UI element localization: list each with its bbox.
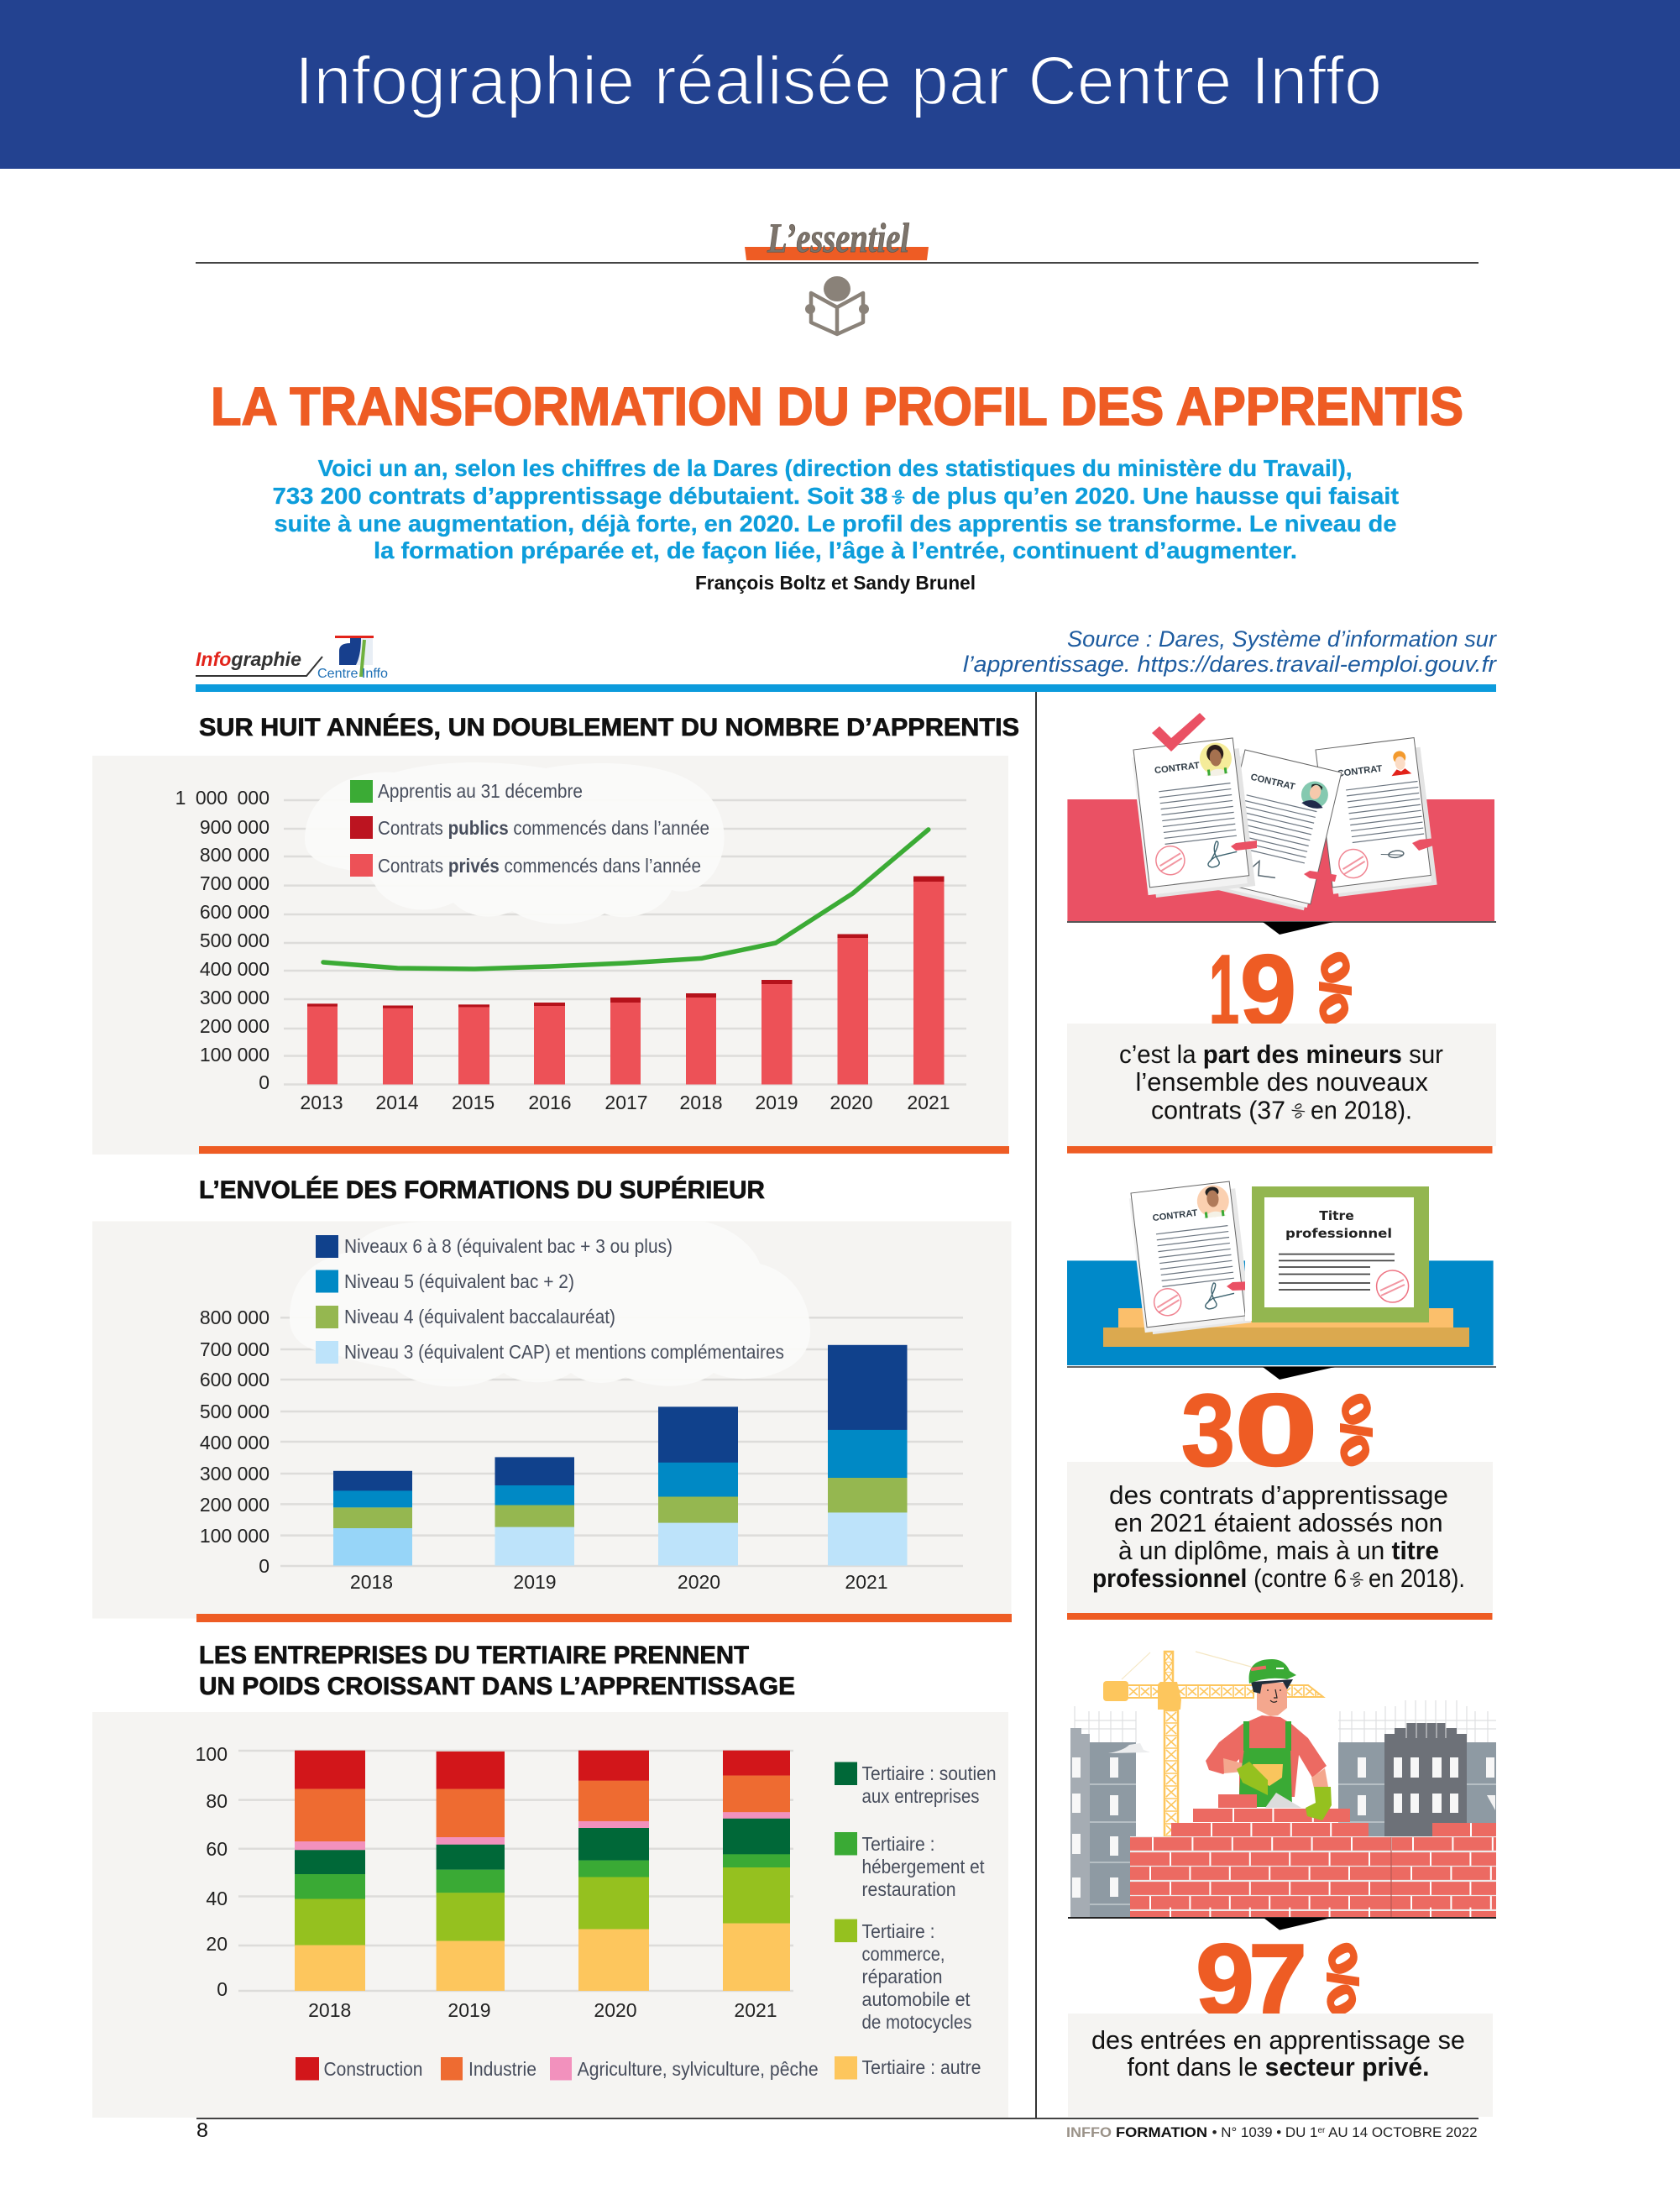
icon: check mark (1152, 713, 1206, 751)
diploma (1245, 1186, 1429, 1322)
text block: en 2018). (1311, 1095, 1412, 1125)
byline: François Boltz et Sandy Brunel (695, 572, 976, 594)
y axis labels: 100 (196, 1743, 228, 1765)
y axis labels: 500 000 (200, 1401, 270, 1422)
forearms (1223, 1758, 1243, 1773)
number 19: 9 (1240, 934, 1296, 1048)
contract document: CONTRAT (1152, 1208, 1198, 1223)
publication line: INFFO (1066, 2124, 1112, 2140)
column divider (1035, 692, 1037, 2118)
diploma: Titre (1319, 1208, 1354, 1223)
panel: formations chart (92, 1176, 1012, 1622)
text block: des contrats d’apprentissage (1109, 1480, 1448, 1510)
text block: % (1286, 1101, 1309, 1122)
text block: en 2021 étaient adossés non (1114, 1508, 1443, 1537)
publication line: er (1317, 2126, 1326, 2135)
percent sign: % (1299, 1931, 1385, 2028)
y axis labels: 900 000 (200, 816, 270, 838)
legend: chart 1: Contrats privés commencés dans l’année (378, 855, 701, 877)
publication line (1066, 2124, 1478, 2140)
crane (1103, 1652, 1323, 1836)
contract document (1128, 1181, 1251, 1335)
x axis labels: 2015 (452, 1092, 495, 1113)
y axis labels (175, 787, 270, 1093)
text block: font dans le secteur privé. (1127, 2052, 1429, 2082)
text block (1067, 1462, 1493, 1613)
intro text (272, 455, 1399, 563)
doc 1 (1131, 737, 1255, 898)
legend: chart 3: Tertiaire : autre (861, 2056, 981, 2078)
y axis labels: 0 (259, 1071, 270, 1093)
mortar joints (1149, 1815, 1496, 1914)
arrow pointer 3 (1264, 1918, 1332, 1930)
legend: chart 1: Contrats publics commencés dans l’année (378, 817, 709, 839)
publication line: AU 14 OCTOBRE 2022 (1325, 2124, 1478, 2140)
legend: chart 2: Niveaux 6 à 8 (équivalent bac + 3 ou plus) (344, 1235, 673, 1257)
legend: chart 2 (316, 1235, 784, 1364)
stacked bars (295, 1751, 790, 1991)
legend: chart 1 (350, 780, 709, 877)
logo: infographie centre inffo: Infographie (196, 648, 301, 670)
x axis labels: 2021 (734, 1999, 777, 2021)
helmet (1249, 1659, 1296, 1684)
percent sign: % (1291, 940, 1378, 1037)
stacked bars (307, 877, 944, 1085)
number 19: 1 (1209, 934, 1239, 1048)
source: l’apprentissage. https://dares.travail-emploi.gouv.fr (963, 652, 1497, 677)
text block: % (1345, 1569, 1367, 1590)
x axis labels: 2020 (678, 1571, 720, 1593)
header banner: Infographie réalisée par Centre Inffo (295, 43, 1382, 119)
overalls (1243, 1721, 1291, 1751)
legend: chart 3: Construction (324, 2058, 423, 2080)
stat: 30 % (1067, 1373, 1493, 1620)
arrow pointer 1 (1263, 922, 1333, 935)
logo: infographie centre inffo (196, 636, 388, 681)
x axis labels (308, 1999, 777, 2021)
publication line: • N° 1039 • DU 1 (1212, 2124, 1318, 2140)
y axis labels: 800 000 (200, 844, 270, 866)
legend: chart 2: Niveau 3 (équivalent CAP) et mentions complémentaires (344, 1341, 784, 1363)
legend cloud (305, 762, 725, 924)
heading: chart 2: L’ENVOLÉE DES FORMATIONS DU SUPÉRIEUR (199, 1176, 765, 1204)
number 97: 9 (1196, 1923, 1254, 2037)
y axis labels: 60 (206, 1838, 228, 1860)
number 30 (1181, 1373, 1318, 1487)
legend: chart 2: Niveau 4 (équivalent baccalauréat) (344, 1306, 615, 1328)
section tag: l'essentiel: L’essentiel (767, 214, 909, 261)
x axis labels: 2013 (300, 1092, 343, 1113)
main title: LA TRANSFORMATION DU PROFIL DES APPRENTIS (211, 376, 1463, 437)
intro text: suite à une augmentation, déjà forte, en 2020. Le profil des apprentis se transforme. Le niveau de (274, 511, 1397, 537)
icon: reader with book (805, 276, 869, 334)
arrow pointer 2 (1263, 1367, 1335, 1380)
doc 3 (1316, 737, 1437, 898)
gridlines (238, 1751, 793, 1991)
text block: c’est la part des mineurs sur (1119, 1040, 1443, 1069)
intro text: 733 200 contrats d’apprentissage débutaient. Soit 38 (272, 483, 888, 509)
y axis labels (200, 1307, 270, 1577)
intro text: la formation préparée et, de façon liée, l’âge à l’entrée, continuent d’augmenter. (374, 537, 1297, 563)
gloves (1237, 1762, 1268, 1795)
y axis labels: 0 (259, 1555, 270, 1577)
intro text: % (887, 487, 908, 507)
illustration: contrats (1067, 713, 1496, 923)
legend: chart 1: Apprentis au 31 décembre (378, 780, 583, 802)
heading: chart 3: LES ENTREPRISES DU TERTIAIRE PRENNENT (199, 1642, 749, 1669)
illustration: titre professionnel (1067, 1181, 1496, 1368)
section tag: l'essentiel (196, 214, 1479, 264)
y axis labels: 500 000 (200, 930, 270, 951)
x axis labels: 2018 (679, 1092, 723, 1113)
header banner (0, 0, 1680, 169)
intro text: Voici un an, selon les chiffres de la Dares (direction des statistiques du ministère du Travail), (318, 455, 1353, 481)
x axis labels (300, 1092, 950, 1113)
x axis labels: 2017 (604, 1092, 648, 1113)
heading: chart 1: SUR HUIT ANNÉES, UN DOUBLEMENT DU NOMBRE D’APPRENTIS (199, 713, 1019, 741)
y axis labels: 300 000 (200, 987, 270, 1008)
doc 2 (1207, 749, 1342, 912)
gridlines (284, 800, 966, 1085)
x axis labels: 2019 (513, 1571, 557, 1593)
x axis labels: 2019 (447, 1999, 491, 2021)
legend: chart 3: commerce, (861, 1943, 945, 1965)
y axis labels: 400 000 (200, 1432, 270, 1453)
publication line: FORMATION (1116, 2124, 1207, 2140)
neck and face (1257, 1696, 1287, 1716)
x axis labels: 2021 (845, 1571, 888, 1593)
heading: chart 3 (199, 1642, 795, 1700)
y axis labels: 40 (206, 1888, 228, 1909)
legend: chart 3: Tertiaire : soutien (861, 1762, 996, 1784)
x axis labels: 2020 (594, 1999, 637, 2021)
text block: professionnel (contre 6 (1092, 1563, 1347, 1593)
y axis labels: 400 000 (200, 958, 270, 980)
diploma: professionnel (1285, 1226, 1392, 1241)
number 19 (1209, 934, 1296, 1048)
y axis labels: 1 000 000 (175, 787, 270, 809)
legend: chart 3: Agriculture, sylviculture, pêche (578, 2058, 819, 2080)
number 97 (1196, 1923, 1307, 2037)
stat: 97 % (1068, 1943, 1493, 2117)
panel: entreprises chart (92, 1642, 1008, 2118)
panel: apprentis chart (92, 713, 1019, 1155)
page number: 8 (196, 2119, 208, 2142)
y axis labels: 700 000 (200, 872, 270, 894)
legend: chart 3: aux entreprises (861, 1785, 979, 1807)
doc 1: CONTRAT (1154, 761, 1201, 776)
text block: contrats (37 (1151, 1095, 1285, 1125)
shirt (1206, 1715, 1327, 1797)
logo: infographie centre inffo: Centre Inffo (317, 667, 388, 681)
legend: chart 3: de motocycles (861, 2011, 972, 2033)
stacked bars (333, 1345, 907, 1565)
y axis labels: 20 (206, 1933, 228, 1955)
legend: chart 2: Niveau 5 (équivalent bac + 2) (344, 1270, 574, 1292)
x axis labels: 2019 (755, 1092, 798, 1113)
number 30: 3 (1181, 1373, 1235, 1487)
y axis labels: 800 000 (200, 1307, 270, 1328)
legend cloud (290, 1222, 810, 1386)
y axis labels: 700 000 (200, 1338, 270, 1360)
legend: chart 3: Tertiaire : (861, 1920, 935, 1942)
number 30: 0 (1234, 1373, 1318, 1487)
text block: des entrées en apprentissage se (1091, 2025, 1465, 2055)
legend: chart 3: restauration (861, 1878, 955, 1900)
text block: l’ensemble des nouveaux (1135, 1067, 1428, 1097)
blue rule (196, 684, 1496, 692)
brick wall (1130, 1787, 1496, 1917)
y axis labels: 0 (217, 1978, 228, 2000)
y axis labels: 100 000 (200, 1044, 270, 1066)
y axis labels: 600 000 (200, 901, 270, 923)
doc 2: CONTRAT (1249, 772, 1296, 793)
x axis labels: 2016 (528, 1092, 572, 1113)
text block (1067, 1024, 1496, 1146)
number 97: 7 (1248, 1923, 1307, 2037)
stat: 19 % (1067, 934, 1496, 1154)
intro text: de plus qu’en 2020. Une hausse qui faisait (912, 483, 1399, 509)
x axis labels: 2014 (375, 1092, 419, 1113)
y axis labels (196, 1743, 228, 2000)
legend: chart 3: Tertiaire : (861, 1833, 935, 1855)
green line (323, 830, 929, 969)
x axis labels: 2018 (308, 1999, 351, 2021)
illustration: chantier (1068, 1652, 1496, 1919)
legend: chart 3: Industrie (468, 2058, 536, 2080)
legend: chart 3 (296, 1762, 996, 2081)
y axis labels: 80 (206, 1790, 228, 1812)
y axis labels: 600 000 (200, 1369, 270, 1390)
y axis labels: 300 000 (200, 1463, 270, 1485)
source: Source : Dares, Système d’information sur (1067, 626, 1497, 652)
legend: chart 3: hébergement et (861, 1856, 985, 1877)
legend: chart 3: automobile et (861, 1988, 971, 2010)
y axis labels: 200 000 (200, 1494, 270, 1516)
percent sign: % (1312, 1382, 1399, 1479)
footer (196, 2118, 1479, 2142)
buildings (1070, 1700, 1496, 1917)
y axis labels: 200 000 (200, 1015, 270, 1037)
text block: à un diplôme, mais à un titre (1118, 1536, 1439, 1565)
legend: chart 3: réparation (861, 1966, 942, 1987)
x axis labels: 2018 (350, 1571, 393, 1593)
x axis labels (350, 1571, 888, 1593)
x axis labels: 2020 (830, 1092, 873, 1113)
worker (1206, 1659, 1328, 1807)
y axis labels: 100 000 (200, 1525, 270, 1547)
doc 3: CONTRAT (1337, 764, 1383, 779)
gridlines (280, 1317, 963, 1566)
source (963, 626, 1497, 677)
text block: en 2018). (1369, 1563, 1465, 1593)
heading: chart 3: UN POIDS CROISSANT DANS L’APPRENTISSAGE (199, 1673, 795, 1700)
text block (1068, 2014, 1493, 2117)
x axis labels: 2021 (907, 1092, 950, 1113)
